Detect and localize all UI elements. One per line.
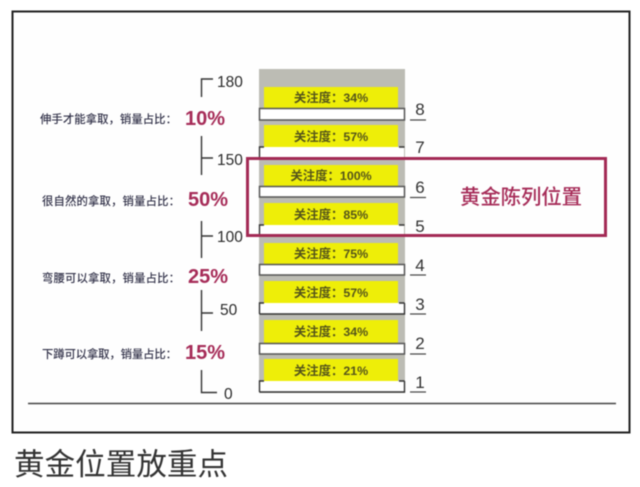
label: squat 15%: 下蹲可以拿取，销量占比： [42, 347, 177, 361]
caption: 黄金位置放重点 [14, 448, 228, 482]
shelf numbers: 6 [415, 178, 425, 197]
shelf 2: 关注度：34% [294, 324, 368, 339]
label: reach up 10%: 伸手才能拿取，销量占比： [40, 112, 177, 126]
shelf numbers: 2 [415, 334, 425, 353]
label: reach up 10% [40, 108, 225, 130]
ground line [28, 402, 616, 404]
label: bend down 25%: 25% [188, 266, 228, 288]
shelf 7 [260, 125, 404, 157]
shelf numbers: 4 [415, 256, 425, 275]
shelf numbers: 1 [415, 373, 425, 392]
shelf numbers [410, 100, 426, 392]
height axis: 150 [217, 152, 243, 169]
shelf 6: 关注度：100% [290, 168, 372, 183]
height axis: 50 [220, 302, 238, 319]
label: natural reach 50% [42, 189, 228, 211]
shelf 1 [260, 359, 404, 392]
shelf 3 [260, 281, 404, 314]
label: bend down 25% [42, 266, 228, 288]
height axis: 100 [217, 229, 243, 246]
shelf 6 [260, 165, 404, 197]
shelf 3: 关注度：57% [294, 285, 368, 300]
label: reach up 10%: 10% [185, 108, 225, 130]
shelf numbers: 5 [415, 217, 425, 236]
shelf numbers: 3 [415, 295, 425, 314]
shelf 8 [260, 87, 404, 120]
label: squat 15%: 15% [185, 342, 225, 364]
height axis: 180 [217, 74, 243, 91]
shelf 5: 关注度：85% [294, 207, 368, 222]
shelf numbers: 8 [415, 100, 425, 119]
golden position label: 黄金陈列位置 [460, 186, 582, 209]
shelf numbers: 7 [415, 138, 425, 157]
shelf rack [259, 69, 405, 393]
shelf 4: 关注度：75% [294, 246, 368, 261]
shelf 1: 关注度：21% [294, 363, 368, 378]
label: natural reach 50%: 很自然的拿取，销量占比： [42, 194, 180, 208]
label: squat 15% [42, 342, 225, 364]
label: natural reach 50%: 50% [188, 189, 228, 211]
shelf 5 [260, 203, 404, 235]
shelf 4 [260, 243, 404, 275]
height axis: 0 [224, 386, 233, 403]
shelf 7: 关注度：57% [294, 129, 368, 144]
shelf 2 [260, 320, 404, 354]
label: bend down 25%: 弯腰可以拿取，销量占比： [42, 271, 180, 285]
height axis [202, 74, 243, 403]
golden position highlight box [248, 158, 606, 236]
shelf 8: 关注度：34% [294, 90, 368, 105]
